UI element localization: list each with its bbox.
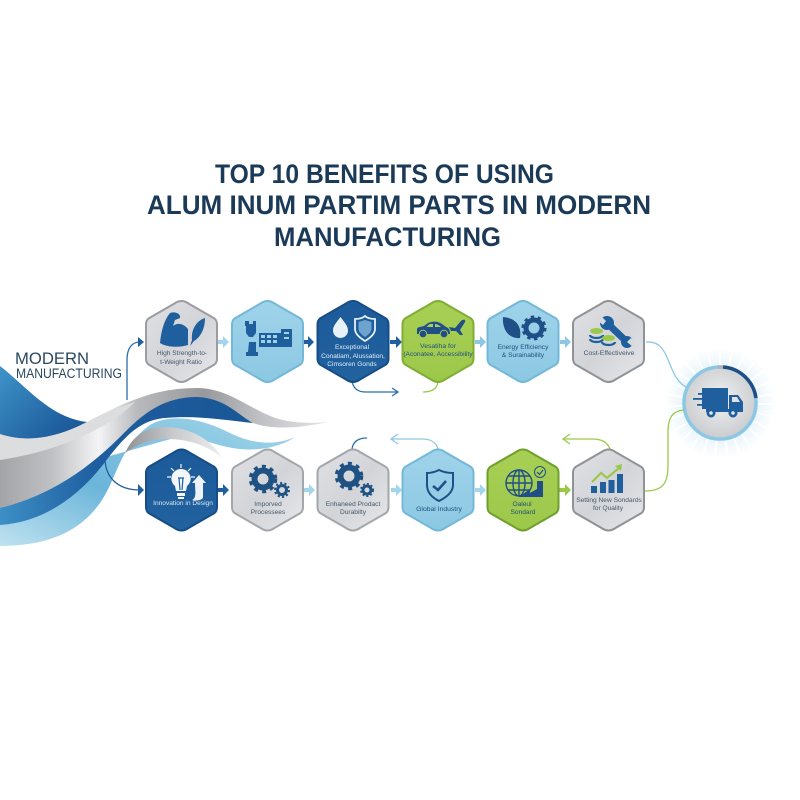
icon: up arrow [192, 475, 206, 500]
label [326, 501, 380, 516]
label: Sondard [511, 509, 536, 516]
label: (Aconatee, Accessibility [403, 351, 473, 358]
icon: shield [355, 316, 375, 341]
title: MANUFACTURING [274, 222, 501, 252]
label [403, 343, 473, 358]
icon: car [417, 322, 450, 338]
icon: bar chart [591, 474, 623, 493]
hexagon 12: new standards [573, 450, 644, 530]
icon: gears [250, 466, 289, 497]
heading: modern manufacturing: MODERN [15, 349, 89, 368]
label: Energy Efficiency [498, 344, 549, 351]
icon: flexed arm [160, 312, 188, 347]
hexagon 2: factory [232, 301, 303, 382]
icon: gears [336, 464, 373, 496]
icon: light bulb [171, 469, 191, 491]
hexagon 11: global standard [488, 450, 558, 530]
title: TOP 10 BENEFITS OF USING [215, 159, 554, 189]
icon: coins [590, 328, 615, 345]
icon: wrench [598, 316, 636, 348]
icon: feather [190, 318, 205, 346]
hexagon 8: improved processes [232, 450, 303, 530]
progress arc [723, 367, 756, 398]
heading: modern manufacturing: MANUFACTURING [16, 366, 122, 381]
label: Vesatiha for [420, 343, 457, 350]
arrowheads between hexagons [138, 336, 571, 496]
icon: truck [693, 388, 743, 418]
hexagon 5: energy efficiency [488, 301, 558, 382]
label: Global Industry [416, 506, 462, 513]
label: Conatiam, Alussation, [321, 353, 385, 360]
label: Setting New Sondards [576, 497, 643, 504]
flowing wave ribbons [0, 366, 328, 546]
heading: modern manufacturing [15, 349, 122, 381]
label [157, 350, 207, 366]
title: ALUM INUM PARTIM PARTS IN MODERN [147, 190, 651, 220]
label: for Quality [593, 505, 624, 512]
label: Cimsoren Gonds [327, 361, 377, 368]
icon: factory [519, 481, 543, 497]
icon: machinery [245, 321, 292, 356]
delivery badge [664, 347, 776, 459]
label: t-Weight Ratio [160, 359, 202, 366]
icon: green trend arrow [592, 468, 619, 482]
icon: check badge [534, 466, 546, 478]
label: Imporved [254, 501, 282, 508]
icon: leaf [503, 317, 520, 338]
hexagon 3: corrosion resistance [318, 301, 388, 382]
label: Processees [251, 509, 286, 516]
icon: shield check [427, 470, 453, 501]
label: Durabilty [340, 509, 367, 516]
icon: water drop [333, 317, 348, 338]
hexagon 7: innovation [146, 450, 217, 530]
icon: sunburst rays [673, 356, 767, 450]
label [576, 497, 643, 512]
label [511, 501, 536, 516]
label: Cost-Effectiveive [584, 350, 635, 357]
icon: gear [526, 320, 542, 336]
icon: plane [449, 320, 465, 335]
label: Exceptional [335, 344, 370, 351]
connectors [105, 342, 686, 491]
hexagon 1: strength-to-weight [146, 301, 217, 382]
label: High Strength-to- [157, 350, 207, 357]
hexagon 9: durability [318, 450, 388, 530]
icon: globe [506, 470, 532, 496]
hexagon 10: global industry [402, 450, 474, 530]
title [147, 159, 651, 252]
hexagon 6: cost effective [573, 301, 644, 382]
label: Innovation in Design [153, 500, 213, 507]
label: & Surainability [502, 352, 545, 359]
hexagon 4: versatile [402, 301, 474, 382]
label: Enhaneed Prodact [326, 501, 380, 508]
label: Oaleul [512, 501, 532, 508]
label [321, 344, 385, 368]
label [498, 344, 549, 359]
label [251, 501, 286, 516]
